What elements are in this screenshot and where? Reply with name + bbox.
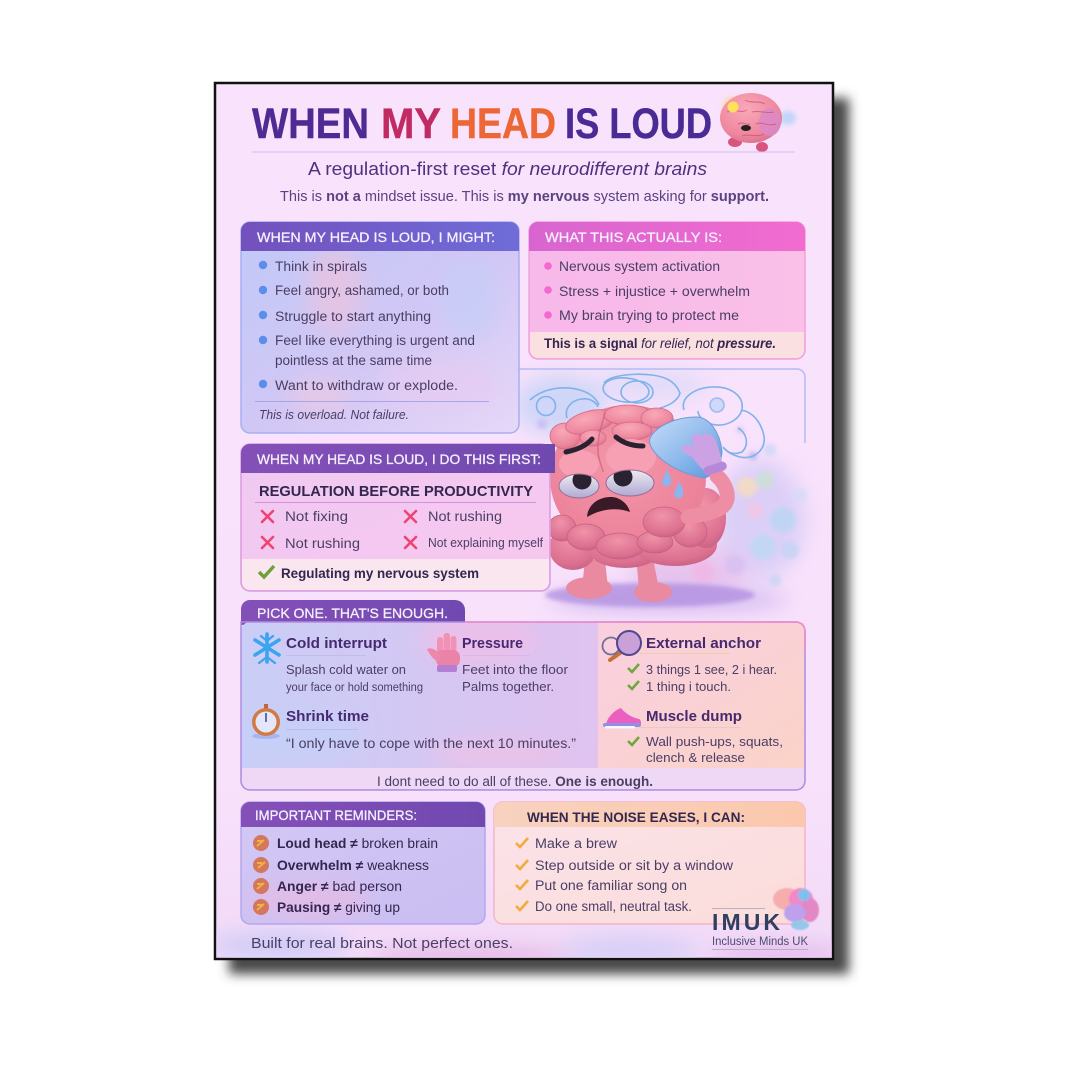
cold interrupt: your face or hold something xyxy=(286,682,423,694)
lower face lobes xyxy=(548,507,707,559)
subtitle: A regulation-first reset for neurodifferent brains xyxy=(308,159,707,179)
title xyxy=(252,100,712,148)
footer band xyxy=(242,559,549,590)
panel wash xyxy=(290,248,500,411)
header text: WHEN THE NOISE EASES, I CAN: xyxy=(527,810,745,825)
footer tagline: Built for real brains. Not perfect ones. xyxy=(251,935,513,952)
bullet list xyxy=(259,259,475,393)
reminder list: Pausing ≠ giving up xyxy=(277,900,400,915)
not-doing list: Not rushing xyxy=(285,536,360,551)
panel: pick one xyxy=(235,600,805,790)
header band xyxy=(241,222,519,251)
bullet list: Struggle to start anything xyxy=(275,309,431,324)
illustration backdrop wash xyxy=(515,371,805,612)
ease list xyxy=(516,836,733,914)
bullet list: Nervous system activation xyxy=(559,259,720,274)
reminder list: Anger ≠ bad person xyxy=(277,879,402,894)
panel body xyxy=(241,622,805,790)
header text: WHEN MY HEAD IS LOUD, I DO THIS FIRST: xyxy=(257,451,541,467)
background watercolour wash xyxy=(216,925,832,958)
tab text: PICK ONE. THAT'S ENOUGH. xyxy=(257,605,448,621)
ease list: Do one small, neutral task. xyxy=(535,899,692,914)
reminder list: Overwhelm ≠ weakness xyxy=(277,858,429,873)
illustration: stressed brain with ice pack xyxy=(545,405,755,607)
external anchor xyxy=(628,635,777,694)
not-doing list: Not explaining myself xyxy=(428,536,544,550)
pressure: Pressure xyxy=(462,635,523,652)
bullet list: Think in spirals xyxy=(275,259,367,274)
head base xyxy=(550,405,706,551)
cold interrupt: Splash cold water on xyxy=(286,663,406,677)
ground shadow xyxy=(545,583,755,607)
external anchor: 3 things 1 see, 2 i hear. xyxy=(646,663,777,677)
shrink time xyxy=(286,708,576,751)
bullet list: Want to withdraw or explode. xyxy=(275,378,458,393)
muscle dump: clench & release xyxy=(646,751,745,765)
bullet list: pointless at the same time xyxy=(275,353,432,368)
tagline: This is not a mindset issue. This is my nervous system asking for support. xyxy=(280,189,769,205)
ice pack xyxy=(649,417,722,478)
icon: sneaker xyxy=(603,708,641,728)
title: WHEN xyxy=(252,100,369,148)
pressure: Feet into the floor xyxy=(462,662,569,677)
pressure xyxy=(462,635,569,694)
pressure: Palms together. xyxy=(462,679,554,694)
icon: stopwatch xyxy=(252,704,280,739)
reminder list xyxy=(253,835,438,915)
top lobes xyxy=(550,405,673,449)
overload note: This is overload. Not failure. xyxy=(259,408,409,422)
title divider xyxy=(252,152,795,153)
title: HEAD xyxy=(450,100,556,148)
cold interrupt: Cold interrupt xyxy=(286,635,387,652)
icon: magnifier xyxy=(602,631,641,660)
footer band xyxy=(530,332,804,358)
bullet list: Stress + injustice + overwhelm xyxy=(559,284,750,299)
not-doing list: Not fixing xyxy=(285,509,348,524)
page shadow xyxy=(229,98,849,974)
cold interrupt xyxy=(286,635,423,694)
tab xyxy=(241,600,465,625)
icon: green check xyxy=(259,566,274,577)
illustration splatter xyxy=(537,419,806,586)
mouth xyxy=(587,497,630,517)
enough note: I dont need to do all of these. One is enough. xyxy=(377,774,653,789)
poster frame xyxy=(215,83,833,959)
arm xyxy=(688,476,727,517)
header text: IMPORTANT REMINDERS: xyxy=(255,808,417,823)
header text: WHAT THIS ACTUALLY IS: xyxy=(545,229,722,245)
puffy eyelids xyxy=(559,439,656,478)
logo: IMUK xyxy=(712,888,819,950)
title: MY xyxy=(381,100,441,148)
logo: IMUK: IMUK xyxy=(712,909,780,935)
header band xyxy=(529,222,805,251)
poster infographic xyxy=(214,82,858,983)
panel wash xyxy=(340,623,554,768)
regulating text: Regulating my nervous system xyxy=(281,566,479,581)
sweat drops xyxy=(662,469,683,498)
logo brain xyxy=(773,888,819,930)
right column xyxy=(598,623,804,768)
eyebrows xyxy=(566,437,643,452)
icon: hand xyxy=(427,633,460,672)
header band xyxy=(241,802,485,827)
not-doing list xyxy=(262,509,544,551)
external anchor: 1 thing i touch. xyxy=(646,680,731,694)
shrink time: “I only have to cope with the next 10 minutes.” xyxy=(286,736,576,751)
title: IS LOUD xyxy=(565,100,712,148)
illustration spirals xyxy=(530,374,764,458)
header band xyxy=(241,444,555,473)
ease list: Step outside or sit by a window xyxy=(535,858,733,873)
panel: important reminders xyxy=(241,802,485,924)
panel: what this actually is xyxy=(529,222,805,359)
head fold xyxy=(598,412,605,472)
subheading: REGULATION BEFORE PRODUCTIVITY xyxy=(259,483,533,500)
bullet list xyxy=(544,259,750,323)
not-doing list: Not rushing xyxy=(428,509,502,524)
panel: when the noise eases xyxy=(494,802,805,924)
panel: when my head is loud, I might xyxy=(241,222,519,433)
bullet list: My brain trying to protect me xyxy=(559,308,739,323)
eyes xyxy=(559,468,654,498)
back lobes xyxy=(549,488,726,570)
bottom strip xyxy=(242,768,804,789)
bullet list: Feel angry, ashamed, or both xyxy=(275,283,449,298)
ease list: Put one familiar song on xyxy=(535,878,687,893)
header text: WHEN MY HEAD IS LOUD, I MIGHT: xyxy=(257,229,495,245)
signal note: This is a signal for relief, not pressure. xyxy=(544,336,776,351)
glove hand xyxy=(682,434,728,476)
ease list: Make a brew xyxy=(535,836,617,851)
logo: IMUK: Inclusive Minds UK xyxy=(712,936,808,948)
header band xyxy=(494,802,805,827)
panel: I do this first xyxy=(241,444,555,591)
panel wash xyxy=(250,882,370,918)
bullet list: Feel like everything is urgent and xyxy=(275,333,475,348)
icon: small brain with flash xyxy=(720,93,796,152)
external anchor: External anchor xyxy=(646,635,761,652)
illustration frame xyxy=(519,369,805,443)
muscle dump: Wall push-ups, squats, xyxy=(646,735,783,749)
icon: snowflake xyxy=(255,634,279,663)
shrink time: Shrink time xyxy=(286,708,369,725)
reminder list: Loud head ≠ broken brain xyxy=(277,836,438,851)
legs xyxy=(566,553,672,602)
muscle dump xyxy=(628,708,783,765)
muscle dump: Muscle dump xyxy=(646,708,742,725)
